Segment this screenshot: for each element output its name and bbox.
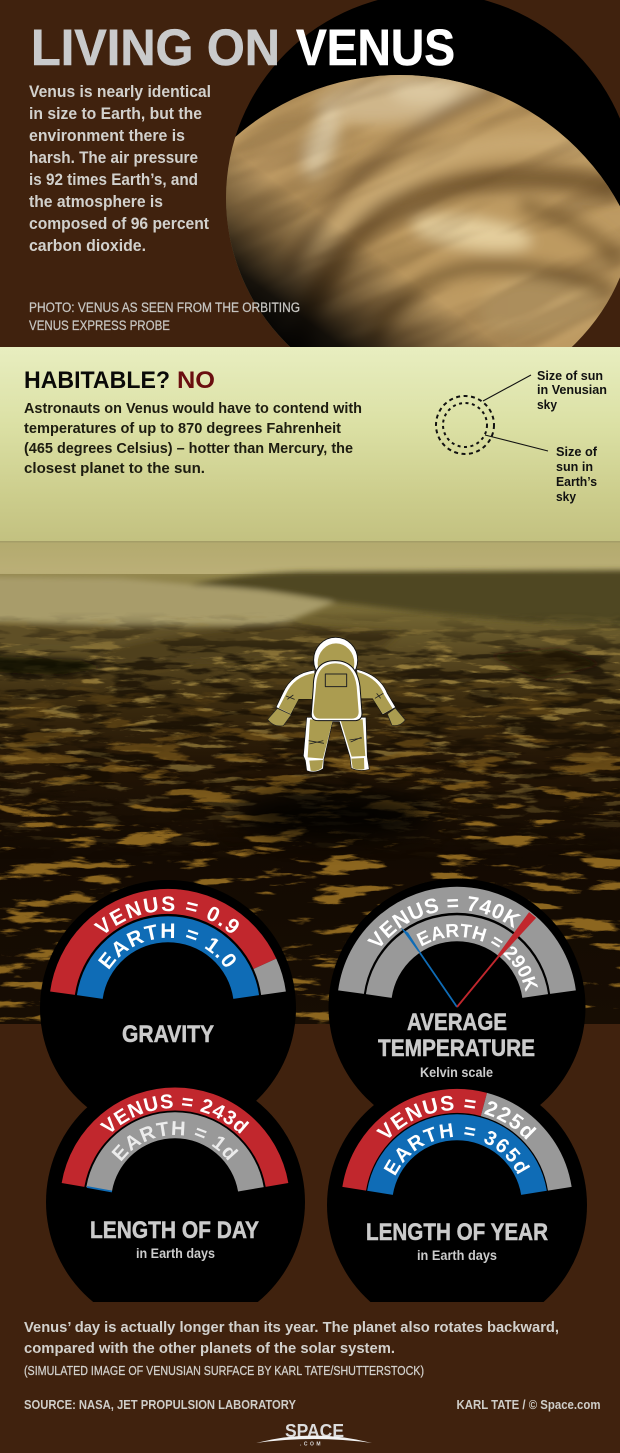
panel: average temperature gauge: EARTH = 290K	[416, 924, 538, 992]
title: VENUS	[296, 19, 455, 76]
title: LIVING ON	[31, 19, 280, 76]
intro text block: the atmosphere is	[29, 193, 163, 211]
intro text block: environment there is	[29, 127, 185, 145]
habitable text block: Astronauts on Venus would have to contend with	[24, 401, 362, 417]
closing text block	[24, 1319, 559, 1378]
closing text block: Venus’ day is actually longer than its year. The planet also rotates backward,	[24, 1319, 559, 1336]
lower gauge backdrops	[46, 1100, 587, 1302]
panel: length of year gauge: VENUS = 225d	[376, 1096, 536, 1140]
photo caption	[29, 300, 300, 333]
panel: length of day gauge: LENGTH OF DAY	[90, 1217, 259, 1244]
photo caption: PHOTO: VENUS AS SEEN FROM THE ORBITING	[29, 300, 300, 315]
panel: length of year gauge: EARTH = 365d	[384, 1123, 530, 1176]
title	[31, 19, 455, 76]
closing text block: compared with the other planets of the solar system.	[24, 1340, 395, 1357]
intro text block: Venus is nearly identical	[29, 83, 211, 101]
sun size diagram: in Venusian	[537, 382, 607, 397]
panel: simulated Venusian landscape	[0, 347, 620, 1030]
panel: length of year gauge: LENGTH OF YEAR	[366, 1219, 548, 1246]
habitable text block	[24, 401, 362, 477]
heading: habitable: HABITABLE?	[24, 367, 170, 394]
panel: average temperature gauge: Kelvin scale	[420, 1064, 493, 1080]
intro text block: in size to Earth, but the	[29, 105, 202, 123]
sun size diagram: Size of sun	[537, 368, 603, 383]
intro text block	[29, 83, 211, 255]
panel: length of day gauge	[62, 1088, 288, 1261]
panel: average temperature gauge: TEMPERATURE	[378, 1035, 535, 1062]
source credit: SOURCE: NASA, JET PROPULSION LABORATORY	[24, 1397, 296, 1412]
closing text block: (SIMULATED IMAGE OF VENUSIAN SURFACE BY KARL TATE/SHUTTERSTOCK)	[24, 1364, 424, 1378]
panel: Venus photo in black circle	[226, 0, 620, 347]
photo caption: VENUS EXPRESS PROBE	[29, 318, 170, 333]
sun size diagram: Size of	[556, 444, 598, 459]
sun size diagram: sky	[556, 489, 577, 504]
panel: gravity gauge: GRAVITY	[122, 1021, 214, 1048]
panel: gravity gauge: EARTH = 1.0	[98, 924, 236, 970]
logo: Space.com	[256, 1421, 372, 1448]
sun size diagram: Earth’s	[556, 474, 597, 489]
panel: average temperature gauge: AVERAGE	[407, 1009, 507, 1036]
heading: habitable: NO	[177, 367, 215, 394]
panel: gravity gauge: VENUS = 0.9	[94, 896, 239, 933]
panel: length of year gauge: in Earth days	[417, 1247, 497, 1263]
sun size diagram: sun in	[556, 459, 593, 474]
icon: astronaut	[268, 637, 405, 772]
panel: length of year gauge	[342, 1088, 572, 1263]
habitable text block: closest planet to the sun.	[24, 461, 205, 477]
intro text block: carbon dioxide.	[29, 237, 146, 255]
sun size diagram	[436, 368, 607, 504]
intro text block: composed of 96 percent	[29, 215, 209, 233]
panel: length of day gauge: in Earth days	[136, 1245, 215, 1261]
panel: average temperature gauge	[328, 878, 586, 1105]
sun size diagram: sky	[537, 397, 558, 412]
intro text block: is 92 times Earth’s, and	[29, 171, 198, 189]
habitable text block: temperatures of up to 870 degrees Fahrenheit	[24, 421, 341, 437]
habitable text block: (465 degrees Celsius) – hotter than Mercury, the	[24, 441, 353, 457]
panel: gravity gauge	[40, 880, 296, 1108]
logo: Space.com: SPACE	[285, 1421, 344, 1441]
logo: Space.com: .COM	[300, 1442, 323, 1448]
panel: average temperature gauge: VENUS = 740K	[367, 896, 521, 946]
intro text block: harsh. The air pressure	[29, 149, 198, 167]
author credit: KARL TATE / © Space.com	[456, 1397, 600, 1412]
panel: length of day gauge: VENUS = 243d	[100, 1094, 250, 1134]
panel: length of day gauge: EARTH = 1d	[112, 1121, 238, 1162]
